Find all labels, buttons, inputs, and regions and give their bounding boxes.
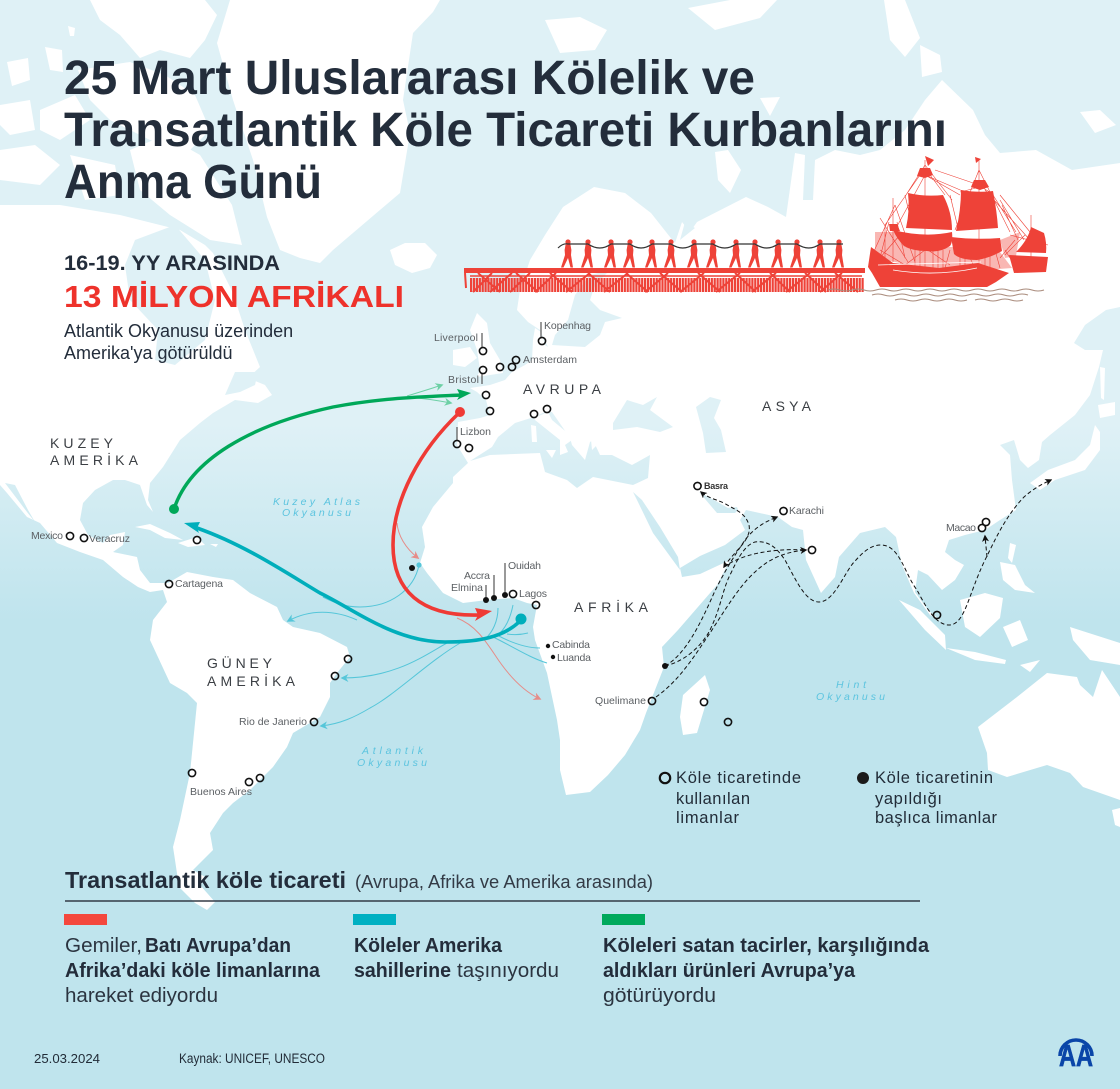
ports: asia xyxy=(694,481,990,619)
port: Lagos xyxy=(509,588,547,609)
column: red route: hareket ediyordu xyxy=(65,985,218,1007)
waves xyxy=(828,289,1044,301)
europe, asia and pacific islands xyxy=(135,0,1120,827)
ports: france and italy xyxy=(482,391,551,418)
port: Kopenhag: Kopenhag xyxy=(544,320,591,332)
port: Macao: Macao xyxy=(946,522,976,534)
region labels: AFRİKA xyxy=(574,598,649,615)
ports: europe xyxy=(434,320,591,452)
ocean labels: Okyanusu xyxy=(282,507,351,519)
port: Elmina: Elmina xyxy=(451,582,483,594)
column: green route: Köleleri satan tacirler, karşılığında xyxy=(603,935,930,957)
port: senegal xyxy=(409,565,415,571)
section heading: Transatlantik köle ticareti xyxy=(65,867,346,893)
legend item: major ports xyxy=(857,769,998,827)
port: Elmina xyxy=(451,582,489,603)
dashed indian ocean routes xyxy=(656,480,1051,697)
port: Amsterdam: Amsterdam xyxy=(523,354,577,366)
port: Cabinda: Cabinda xyxy=(552,639,590,651)
region labels: AVRUPA xyxy=(523,381,602,397)
description: Amerika'ya götürüldü xyxy=(64,343,233,363)
date: 25.03.2024 xyxy=(34,1051,100,1066)
legend item: major ports: yapıldığı xyxy=(875,790,942,808)
thin secondary routes xyxy=(288,385,547,726)
illustration: slave ship and pier xyxy=(464,156,1048,301)
source: Kaynak: UNICEF, UNESCO xyxy=(179,1051,325,1066)
column: red route: Batı Avrupa’dan xyxy=(145,935,291,957)
column: teal route: sahillerine xyxy=(354,960,451,982)
ports: brazil xyxy=(331,655,352,680)
port: Kopenhag xyxy=(538,320,591,345)
column: teal route xyxy=(353,914,559,982)
title: 25 Mart Uluslararası Kölelik ve xyxy=(64,52,755,105)
port: Amsterdam xyxy=(496,354,577,371)
title xyxy=(64,52,947,209)
ports: the americas xyxy=(31,530,352,798)
dense rigging wash xyxy=(875,232,1020,272)
arctic islands xyxy=(0,0,242,245)
port: Rio de Janerio: Rio de Janerio xyxy=(239,716,307,728)
ports: madagascar and mauritius xyxy=(700,698,732,726)
port: Bristol xyxy=(448,366,487,386)
region labels: AMERİKA xyxy=(50,451,139,468)
ocean labels: Hint xyxy=(836,679,867,691)
region labels xyxy=(50,381,812,689)
port: Bristol: Bristol xyxy=(448,374,479,386)
legend item: major ports: Köle ticaretinin xyxy=(875,769,993,787)
column: red route: Afrika’daki köle limanlarına xyxy=(65,960,321,982)
period text: 16-19. YY ARASINDA xyxy=(64,252,280,275)
ship xyxy=(868,156,1048,287)
section heading: (Avrupa, Afrika ve Amerika arasında) xyxy=(355,871,653,892)
port: Veracruz: Veracruz xyxy=(89,533,130,545)
title: Anma Günü xyxy=(64,156,322,209)
ocean labels: Kuzey Atlas xyxy=(273,496,361,508)
pale red routes xyxy=(397,523,418,558)
legend item: ports used: Köle ticaretinde xyxy=(676,769,801,787)
port: Macao xyxy=(946,518,990,534)
greenland and iceland xyxy=(217,0,440,273)
teal route: enslaved people to the Americas xyxy=(184,522,526,642)
region labels: KUZEY xyxy=(50,435,114,451)
legend item: ports used: limanlar xyxy=(676,809,740,827)
port: Accra: Accra xyxy=(464,570,490,582)
port: Cartagena: Cartagena xyxy=(175,578,223,590)
port: Basra: Basra xyxy=(704,481,729,491)
port: Ouidah xyxy=(502,560,541,598)
red route: ships to Africa xyxy=(393,407,492,621)
port: Lizbon xyxy=(453,426,491,452)
title: Transatlantik Köle Ticareti Kurbanlarını xyxy=(64,104,947,157)
port: mozambique xyxy=(662,663,668,669)
port: Karachi: Karachi xyxy=(789,505,824,517)
ocean labels: Atlantik xyxy=(361,745,424,757)
legend: port types xyxy=(660,769,998,827)
port: Mexico: Mexico xyxy=(31,530,63,542)
port: Buenos Aires: Buenos Aires xyxy=(190,786,252,798)
headline number: 13 MİLYON AFRİKALI xyxy=(64,279,404,314)
port: Liverpool: Liverpool xyxy=(434,332,478,344)
landmass: north and south america xyxy=(0,205,350,910)
column: teal route: Köleler Amerika xyxy=(354,935,503,957)
logo: Anadolu Agency: AA xyxy=(1059,1038,1093,1073)
column: green route xyxy=(602,914,930,1007)
chained walkers xyxy=(558,239,844,268)
port: Buenos Aires xyxy=(188,769,264,798)
port: malacca xyxy=(933,611,941,619)
region labels: GÜNEY xyxy=(207,654,273,671)
column: red route: Gemiler, xyxy=(65,935,142,957)
port: Lizbon: Lizbon xyxy=(460,426,491,438)
thin green routes xyxy=(407,385,442,396)
green route: traders to Europe xyxy=(169,389,471,514)
port: Quelimane: Quelimane xyxy=(595,695,646,707)
port: Lagos: Lagos xyxy=(519,588,547,600)
ocean labels: Okyanusu xyxy=(816,691,885,703)
port: Basra xyxy=(694,481,729,491)
ports: africa xyxy=(409,560,732,726)
small teal origin dot xyxy=(416,562,422,568)
port: Accra xyxy=(464,570,497,601)
subheading block xyxy=(64,252,404,363)
landmass: eurasia and africa xyxy=(420,80,1120,795)
legend item: ports used xyxy=(660,769,801,827)
column: green route: götürüyordu xyxy=(603,985,716,1007)
column: red route xyxy=(64,914,321,1007)
region labels: AMERİKA xyxy=(207,672,296,689)
legend item: major ports: başlıca limanlar xyxy=(875,809,998,827)
column: green route: aldıkları ürünleri Avrupa’ya xyxy=(603,960,856,982)
column: teal route: taşınıyordu xyxy=(457,960,559,982)
section heading xyxy=(65,867,920,901)
port: Liverpool xyxy=(434,332,487,355)
port: caribbean xyxy=(193,536,201,544)
inland seas xyxy=(5,222,738,570)
ocean labels xyxy=(273,496,885,769)
region labels: ASYA xyxy=(762,398,812,414)
legend item: ports used: kullanılan xyxy=(676,790,750,808)
port: Luanda: Luanda xyxy=(557,652,591,664)
port: india xyxy=(808,546,816,554)
ocean labels: Okyanusu xyxy=(357,757,427,769)
bottom section: transatlantic trade xyxy=(64,867,930,1007)
pier xyxy=(464,268,865,292)
thin teal routes xyxy=(323,565,419,607)
description: Atlantik Okyanusu üzerinden xyxy=(64,321,293,341)
port: Ouidah: Ouidah xyxy=(508,560,541,572)
